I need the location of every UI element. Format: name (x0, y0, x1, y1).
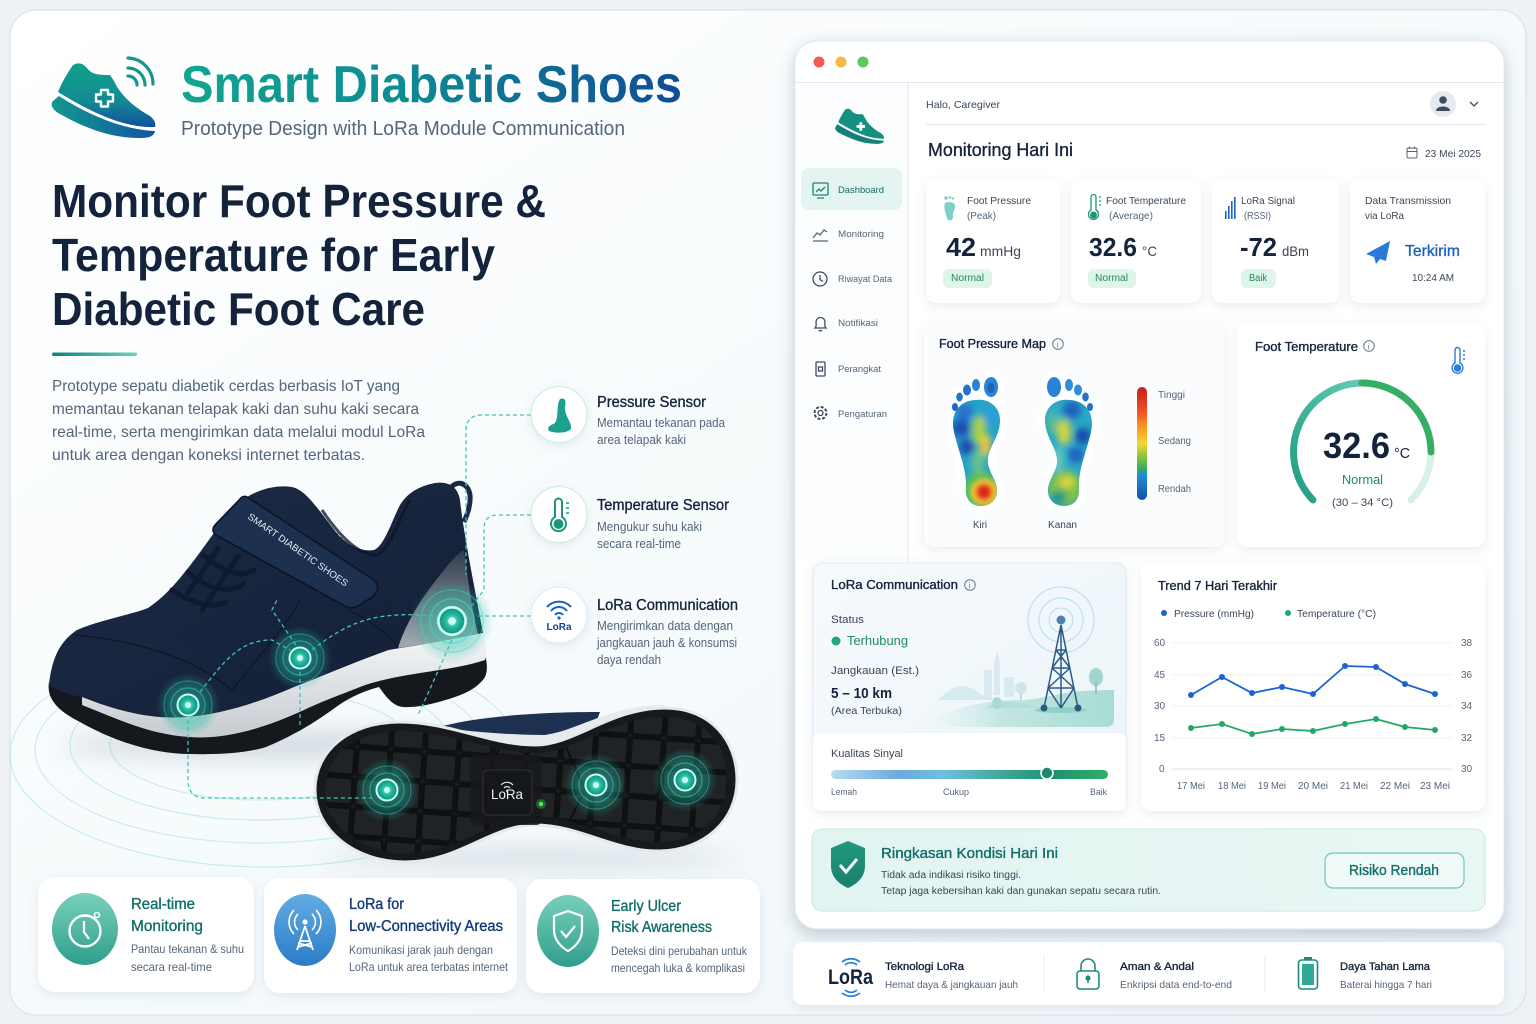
panel: foot temperature gauge: (30 – 34 °C) (1332, 497, 1393, 509)
icon: device (816, 362, 825, 376)
callout: LoRa communication (531, 587, 738, 667)
icon: signal bars (1225, 197, 1236, 219)
signal quality bar (813, 733, 1126, 811)
panel: 7-day trend chart (1141, 564, 1485, 811)
x axis labels: 19 Mei (1258, 781, 1286, 792)
signal quality bar: Lemah (831, 787, 857, 797)
feature card: early ulcer risk awareness (526, 879, 760, 993)
feature card: real-time monitoring: Real-time (131, 896, 195, 913)
stat card: data transmission: Data Transmission (1365, 195, 1451, 207)
shoe: sole view (315, 700, 740, 870)
icon: monitoring (813, 230, 828, 241)
callout: temperature sensor: Temperature Sensor (597, 497, 729, 514)
date (1407, 146, 1481, 160)
intro paragraph: real-time, serta mengirimkan data melalui modul LoRa (52, 424, 425, 441)
sensor glow points (156, 579, 717, 822)
stat card: foot temperature (1071, 179, 1201, 303)
sidebar logo (835, 109, 884, 144)
y axis labels: 30 (1154, 701, 1166, 712)
panel: foot pressure map (924, 323, 1224, 547)
feature card: LoRa low connectivity: Low-Connectivity Areas (349, 918, 503, 935)
intro paragraph: untuk area dengan koneksi internet terbatas. (52, 447, 365, 464)
x axis labels: 22 Mei (1380, 781, 1410, 792)
stat card: foot temperature: (Average) (1109, 210, 1153, 222)
y axis labels: 15 (1154, 733, 1166, 744)
panel: daily condition summary (812, 829, 1485, 911)
sidebar menu: Pengaturan (838, 409, 887, 420)
x axis labels (1177, 781, 1450, 792)
stat card: foot pressure (926, 179, 1060, 303)
icon: footprint (944, 196, 955, 221)
y axis labels: 34 (1461, 701, 1473, 712)
feature card: LoRa low connectivity: Komunikasi jarak jauh dengan (349, 943, 493, 957)
chart legend (1161, 609, 1376, 620)
panel: daily condition summary: Ringkasan Kondisi Hari Ini (881, 846, 1058, 862)
stat card: LoRa signal: (RSSI) (1244, 210, 1271, 222)
shoe: side view (49, 483, 487, 759)
panel: foot temperature gauge: i (1368, 342, 1370, 352)
callout: temperature sensor (531, 486, 729, 551)
callout: temperature sensor: secara real-time (597, 537, 681, 551)
icon: shield check (831, 841, 865, 888)
icon: history clock (813, 272, 827, 286)
feature card: early ulcer risk awareness: Early Ulcer (611, 898, 681, 915)
temperature gauge arc (1294, 383, 1431, 500)
icon: LoRa logo (828, 959, 873, 996)
stat card: data transmission: 10:24 AM (1412, 273, 1454, 284)
dashboard heading: Monitoring Hari Ini (928, 140, 1073, 160)
icon: paper plane (1366, 241, 1390, 264)
signal quality bar: Kualitas Sinyal (831, 748, 903, 760)
velcro strap with label: SMART DIABETIC SHOES (245, 511, 350, 589)
sidebar menu: Dashboard (838, 185, 884, 196)
temperature line (1188, 716, 1438, 737)
panel: LoRa communication: 5 – 10 km (831, 686, 892, 702)
stat card: LoRa signal: Baik (1249, 273, 1268, 284)
footer feature strip: Teknologi LoRa (885, 961, 965, 973)
panel: foot pressure map: Foot Pressure Map (939, 337, 1046, 351)
pressure color scale (1137, 387, 1191, 500)
panel: LoRa communication: Terhubung (847, 634, 908, 648)
panel: 7-day trend chart: Trend 7 Hari Terakhir (1158, 579, 1277, 593)
signal quality bar: Cukup (943, 787, 969, 797)
stat card: LoRa signal: -72 (1240, 232, 1277, 262)
subtitle: Prototype Design with LoRa Module Communication (181, 118, 625, 140)
panel: foot pressure map: i (1057, 340, 1059, 350)
callout: LoRa communication: jangkauan jauh & konsumsi (596, 636, 737, 650)
icon: LoRa logo: LoRa (828, 966, 873, 989)
icon: dashboard (813, 183, 828, 198)
feature card: early ulcer risk awareness: mencegah luka & komplikasi (611, 961, 745, 975)
stat card: LoRa signal: LoRa Signal (1241, 195, 1295, 207)
y axis labels: 32 (1461, 733, 1473, 744)
heatmap: left foot (952, 377, 1000, 506)
callout: LoRa communication: Mengirimkan data dengan (597, 619, 733, 633)
stat card: LoRa signal (1212, 179, 1339, 303)
header greeting: Halo, Caregiver (926, 99, 1001, 111)
sidebar menu: Monitoring (838, 229, 884, 240)
stat card: foot temperature: Normal (1095, 273, 1128, 284)
main heading: Temperature for Early (52, 229, 495, 281)
signal wave rings (10, 643, 520, 867)
panel: LoRa communication: LoRa Communication (831, 578, 958, 592)
panel: LoRa communication (813, 563, 1126, 811)
title: Smart Diabetic Shoes (181, 56, 682, 114)
callout: temperature sensor: Mengukur suhu kaki (597, 520, 702, 534)
feature card: LoRa low connectivity: LoRa untuk area terbatas internet (349, 960, 509, 974)
risk badge: Risiko Rendah (1349, 863, 1439, 879)
panel: LoRa communication: i (969, 582, 971, 590)
sidebar menu: Perangkat (838, 364, 881, 375)
risk badge (1325, 853, 1464, 888)
pressure color scale: Tinggi (1158, 390, 1185, 401)
sensor connectors (188, 415, 531, 798)
pressure color scale: Sedang (1158, 436, 1191, 447)
icon: padlock (1077, 959, 1099, 989)
callout: pressure sensor: Pressure Sensor (597, 394, 706, 411)
heatmap: right foot (1045, 377, 1093, 506)
y axis labels: 0 (1159, 764, 1165, 775)
main heading: Monitor Foot Pressure & (52, 175, 546, 227)
y axis labels: 60 (1154, 638, 1166, 649)
callout: LoRa communication: daya rendah (597, 653, 661, 667)
stat card: LoRa signal: dBm (1282, 243, 1309, 259)
callout: pressure sensor: area telapak kaki (597, 433, 686, 447)
chart legend: Pressure (mmHg) (1174, 609, 1254, 620)
LoRa module on sole (483, 770, 546, 815)
dashboard window (795, 41, 1504, 929)
y axis labels: 38 (1461, 638, 1473, 649)
velcro strap with label (213, 496, 378, 608)
footer feature strip: Enkripsi data end-to-end (1120, 980, 1232, 991)
panel: LoRa communication: Status (831, 614, 865, 626)
footer feature strip: Hemat daya & jangkauan jauh (885, 980, 1018, 991)
stat card: foot pressure: Normal (951, 273, 984, 284)
chart legend: Temperature (°C) (1297, 609, 1376, 620)
x axis labels: 18 Mei (1218, 781, 1246, 792)
feature card: real-time monitoring: Monitoring (131, 918, 203, 935)
pressure line (1188, 663, 1438, 698)
x axis labels: 17 Mei (1177, 781, 1205, 792)
feature card: early ulcer risk awareness: Risk Awareness (611, 919, 712, 936)
x axis labels: 23 Mei (1420, 781, 1450, 792)
panel: foot temperature gauge (1237, 324, 1485, 547)
panel: LoRa communication: (Area Terbuka) (831, 705, 902, 717)
pressure color scale: Rendah (1158, 484, 1191, 495)
icon: thermometer (1088, 194, 1101, 219)
logo: shoe with wifi (52, 58, 155, 138)
icon: settings (814, 407, 826, 419)
feature card: early ulcer risk awareness: Deteksi dini perubahan untuk (611, 944, 747, 958)
panel: daily condition summary: Tidak ada indikasi risiko tinggi. (881, 870, 1021, 881)
feature card: LoRa low connectivity (264, 878, 517, 993)
y axis labels: 30 (1461, 764, 1473, 775)
sidebar menu: Notifikasi (838, 318, 878, 329)
stat card: foot temperature: °C (1142, 243, 1157, 259)
sidebar menu: Riwayat Data (838, 274, 893, 285)
illustration: tower and landscape (925, 587, 1114, 727)
stat card: foot pressure: (Peak) (967, 210, 996, 222)
sidebar menu (801, 168, 902, 420)
main heading (52, 175, 546, 335)
callout: pressure sensor: Memantau tekanan pada (597, 416, 725, 430)
stat card: data transmission: Terkirim (1405, 243, 1460, 260)
stat card: data transmission (1350, 179, 1485, 303)
panel: daily condition summary: Tetap jaga kebersihan kaki dan gunakan sepatu secara rutin. (881, 886, 1161, 897)
window control dots (814, 56, 868, 68)
feature card: real-time monitoring (38, 877, 254, 992)
footer feature strip: Aman & Andal (1120, 961, 1194, 973)
icon: thermometer blue (1452, 348, 1465, 373)
footer feature strip: Baterai hingga 7 hari (1340, 980, 1432, 991)
feature card: real-time monitoring: secara real-time (131, 960, 212, 974)
stat card: foot temperature: 32.6 (1089, 232, 1137, 262)
y axis labels: 45 (1154, 670, 1166, 681)
stat card: foot pressure: 42 (946, 232, 976, 262)
panel: foot temperature gauge: 32.6 (1323, 425, 1390, 466)
stat card: foot pressure: mmHg (980, 243, 1021, 259)
footer feature strip: Daya Tahan Lama (1340, 961, 1431, 973)
panel: foot temperature gauge: Normal (1342, 473, 1383, 487)
main heading: Diabetic Foot Care (52, 283, 425, 335)
stat card: data transmission: via LoRa (1365, 210, 1404, 222)
intro paragraph: memantau tekanan telapak kaki dan suhu kaki secara (52, 401, 419, 418)
icon: battery (1298, 957, 1318, 989)
callout: pressure sensor (531, 386, 725, 447)
intro paragraph (52, 378, 425, 464)
stat card: foot temperature: Foot Temperature (1106, 195, 1186, 207)
panel: foot pressure map: Kanan (1048, 520, 1077, 531)
signal quality bar: Baik (1090, 787, 1107, 797)
panel: foot temperature gauge: °C (1394, 445, 1410, 462)
stat card: foot pressure: Foot Pressure (967, 195, 1031, 207)
x axis labels: 20 Mei (1298, 781, 1328, 792)
LoRa module on sole: LoRa (491, 786, 523, 802)
icon: bell (815, 318, 826, 331)
callout: LoRa communication: LoRa Communication (597, 597, 738, 614)
feature card: real-time monitoring: Pantau tekanan & suhu (131, 942, 244, 956)
feature card: LoRa low connectivity: LoRa for (349, 896, 404, 913)
panel: LoRa communication: Jangkauan (Est.) (831, 665, 919, 677)
user avatar (1430, 91, 1478, 117)
y axis labels: 36 (1461, 670, 1473, 681)
x axis labels: 21 Mei (1340, 781, 1368, 792)
y axis labels (1154, 638, 1473, 775)
footer feature strip (793, 942, 1504, 1005)
callout: LoRa communication: LoRa (546, 621, 572, 633)
date: 23 Mei 2025 (1425, 148, 1481, 160)
panel: foot temperature gauge: Foot Temperature (1255, 340, 1358, 354)
panel: foot pressure map: Kiri (973, 520, 987, 531)
intro paragraph: Prototype sepatu diabetik cerdas berbasis IoT yang (52, 378, 400, 395)
